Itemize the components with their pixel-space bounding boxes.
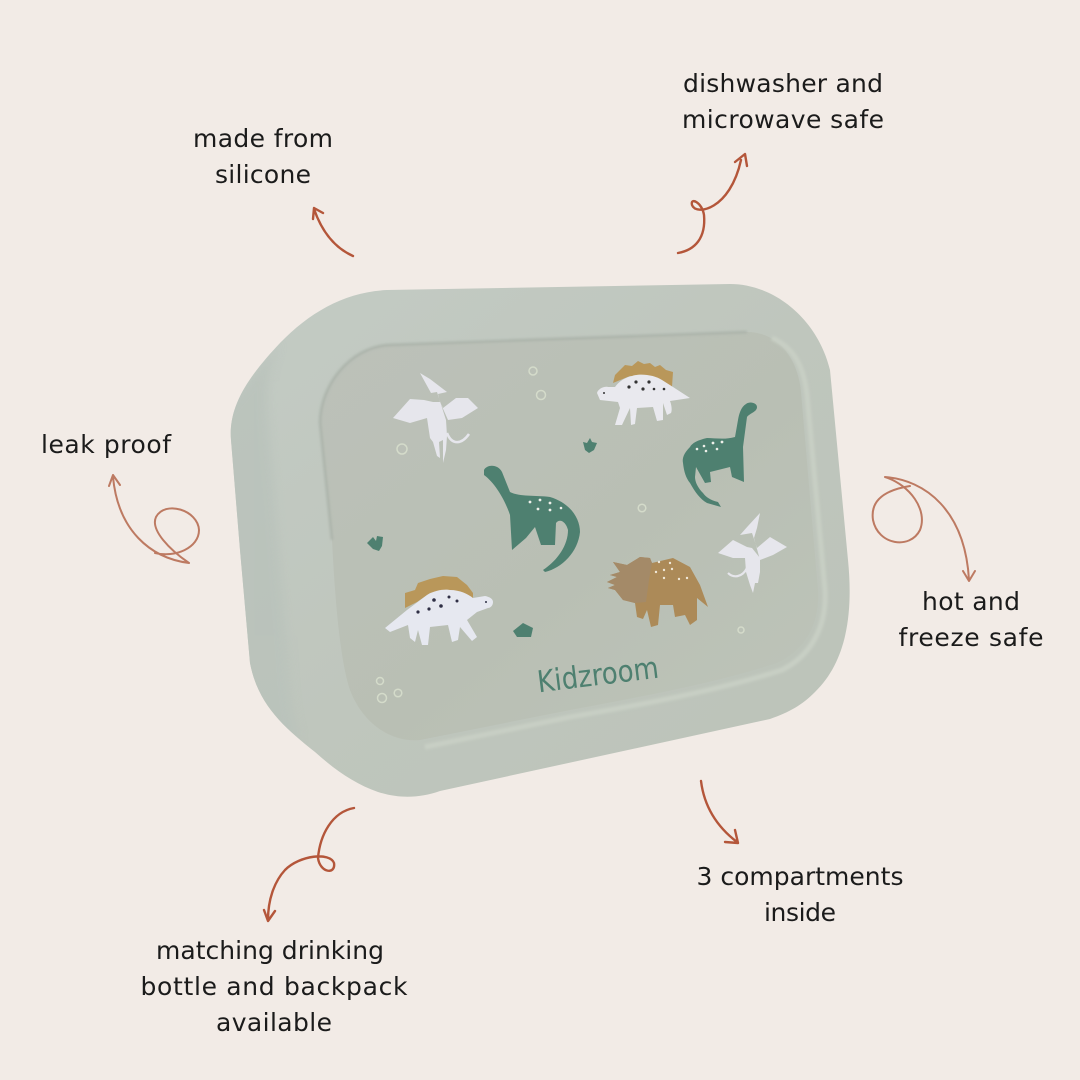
box body shading: [230, 390, 290, 730]
label: hot and freeze safe: [898, 587, 1044, 652]
dino: brown triceratops: [607, 557, 708, 627]
label: 3 compartments inside: 3 compartments: [696, 862, 904, 891]
label: dishwasher and microwave safe: microwave safe: [682, 105, 884, 134]
dino: white pterosaur right: [718, 513, 787, 593]
footprints and bubbles: [367, 367, 744, 702]
brand logo: Kidzroom: [535, 651, 661, 700]
label: 3 compartments inside: inside: [764, 898, 836, 927]
arrow: silicone: [313, 208, 353, 256]
label: 3 compartments inside: [696, 862, 904, 927]
dino: white pterosaur top left: [393, 373, 478, 463]
label: hot and freeze safe: freeze safe: [898, 623, 1044, 652]
label: matching bottle and backpack: [140, 936, 408, 1037]
arrow: three compartments: [701, 781, 738, 843]
label: made from silicone: made from: [193, 124, 333, 153]
dino: white stegosaurus top: [597, 361, 690, 425]
label: hot and freeze safe: hot and: [922, 587, 1020, 616]
label: dishwasher and microwave safe: [682, 69, 884, 134]
lid inner edge shadow: [320, 332, 747, 540]
dino: white stegosaurus bottom left: [385, 576, 493, 645]
label: dishwasher and microwave safe: dishwasher and: [683, 69, 883, 98]
label: leak proof: leak proof: [41, 430, 172, 459]
lid inner edge ridge: [425, 338, 825, 747]
label: made from silicone: [193, 124, 333, 189]
label: made from silicone: silicone: [215, 160, 311, 189]
lunch box product image: [215, 284, 850, 797]
label: matching bottle and backpack: available: [216, 1008, 332, 1037]
arrow: hot and freeze: [873, 477, 975, 581]
label: matching bottle and backpack: matching drinking: [156, 936, 384, 965]
arrow: dishwasher: [678, 154, 747, 253]
dino: green brontosaurus right: [683, 403, 757, 507]
lid inner panel: [320, 332, 818, 740]
label: matching bottle and backpack: bottle and backpack: [140, 972, 408, 1001]
arrow: leak proof: [109, 475, 199, 563]
box silhouette: [231, 284, 850, 797]
arrow: matching products: [264, 808, 354, 921]
dino: green brontosaurus centre: [484, 466, 580, 572]
